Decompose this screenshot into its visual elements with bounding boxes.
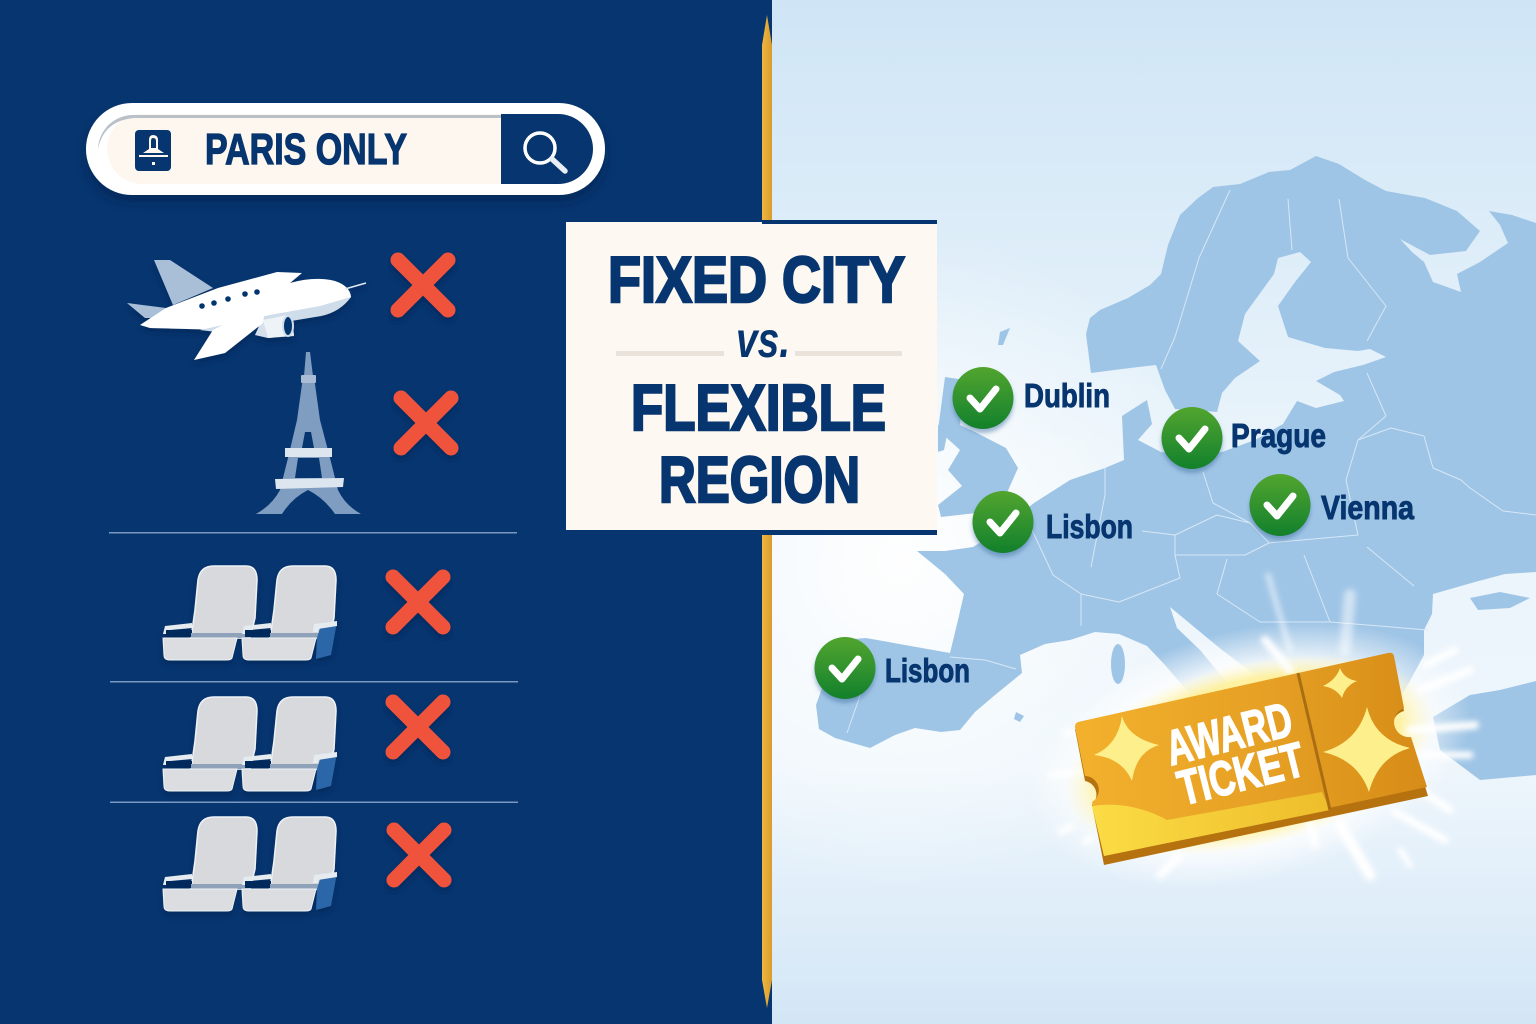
icon: small star [1323,668,1357,698]
icon: seats row 3 [163,817,337,911]
icon: seats row 1 [163,566,337,660]
ticket: yellow wave [1092,792,1330,856]
icon: Eiffel Tower [256,352,361,514]
map: Corsica [1111,644,1125,684]
icon: passenger badge [135,130,171,171]
ticket: award ticket [1075,653,1428,865]
marker: Lisbon south [814,637,970,699]
marker: Lisbon north: Lisbon [1046,508,1133,545]
divider: row line 1 [109,532,517,534]
text: AWARD: AWARD [1160,693,1298,776]
icon: red cross row 1 [393,577,443,627]
marker: Lisbon south: Lisbon [885,652,970,689]
icon: red cross row 2 [393,702,443,752]
divider: row line 3 [110,802,518,803]
marker: Dublin [952,367,1110,429]
marker: Lisbon north [972,491,1133,553]
marker: Vienna: Vienna [1321,489,1415,526]
text: vs.: vs. [736,312,790,368]
text: TICKET: TICKET [1172,733,1310,816]
marker: Prague: Prague [1231,417,1326,454]
icon: airplane [127,260,366,360]
panel: right sky background [772,0,1536,1024]
heading: FLEXIBLE: FLEXIBLE [631,371,886,444]
icon: magnifier [525,133,565,171]
icon: right star [1323,707,1410,792]
text: vs. [616,312,902,368]
map: country borders [847,190,1536,733]
panel: left navy background [0,0,772,1024]
marker: Prague [1162,407,1326,469]
marker: Vienna [1250,474,1415,536]
search bar [86,103,605,195]
heading: FIXED CITY: FIXED CITY [608,243,905,316]
heading: REGION: REGION [659,443,860,516]
icon: red cross for Eiffel Tower [401,398,451,448]
panel: title card [566,220,937,535]
icon: red cross for plane [398,260,448,310]
icon: red cross row 3 [394,830,444,880]
map: Europe [816,156,1536,780]
divider: gold vertical bar [762,15,772,1008]
glow: rays [1050,575,1475,875]
divider: row line 2 [110,681,518,682]
ticket: stub divider [1298,673,1330,810]
text: PARIS ONLY: PARIS ONLY [205,125,407,174]
map: British Isles [938,377,1018,517]
icon: left star [1094,716,1159,781]
glow: ticket burst [1001,575,1499,931]
marker: Dublin: Dublin [1024,377,1110,414]
icon: seats row 2 [163,697,337,791]
